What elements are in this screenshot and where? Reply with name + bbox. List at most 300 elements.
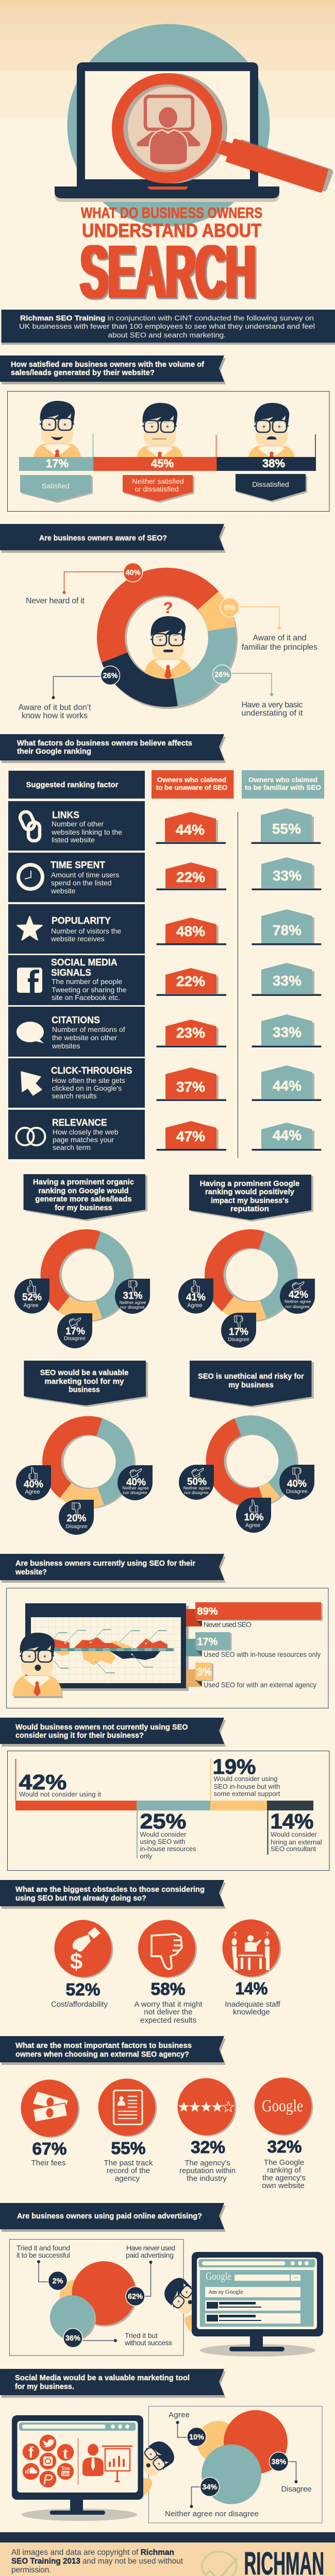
heading: agency factors: What are the most important factors to business <box>15 2042 192 2050</box>
bubble chart <box>197 2410 288 2504</box>
bars: ranking factor percentages <box>156 808 321 1158</box>
row: citations: websites <box>52 1042 80 1050</box>
obstacle: results worry: A worry that it might <box>134 2000 203 2009</box>
callout: never used 62%: Have never used <box>126 2244 175 2252</box>
badge: disagree 17% <box>57 1313 92 1348</box>
bars: popularity <box>157 909 321 945</box>
stat: 42%: Would not consider using it <box>19 1790 101 1798</box>
row: popularity: POPULARITY <box>52 916 111 926</box>
heading: ranking factors: What factors do business owners believe affects <box>17 739 192 748</box>
badge: disagree 17%: Disagree <box>228 1336 249 1343</box>
badge: disagree 20%: 20% <box>66 1513 87 1524</box>
monitor: google ads: Google <box>206 2270 231 2282</box>
badge: agree 40%: Agree <box>25 1489 40 1495</box>
row: relevance: How closely the web <box>53 1128 119 1136</box>
callout: aware and familiar: Aware of it and <box>253 634 306 642</box>
logo: richman <box>196 2546 324 2576</box>
row: relevance: page matches your <box>53 1136 114 1144</box>
bars: time spent: 33% <box>273 868 301 884</box>
badge: neither 40% <box>118 1465 153 1500</box>
factor: track record: 55% <box>111 2139 145 2158</box>
factor: reputation: reputation within <box>179 2166 236 2175</box>
badge: neither 40%: 40% <box>126 1477 146 1488</box>
obstacle: results worry: 58% <box>150 1979 186 1998</box>
heading: satisfaction <box>0 355 226 384</box>
callout: valuable tool statement: marketing tool for my <box>44 1378 124 1386</box>
callout: without success 36%: Tried it but <box>125 2331 158 2340</box>
row: social media: site on Facebook etc. <box>52 993 120 1002</box>
label: satisfied <box>20 475 93 503</box>
callout: disagree 38%: 38% <box>271 2458 287 2466</box>
table header: familiar owners: Owners who claimed <box>248 776 317 784</box>
factor: reputation: 32% <box>191 2138 225 2157</box>
row: click-throughs: clicked on in Google's <box>52 1084 122 1092</box>
table header: ranking factor <box>8 771 145 799</box>
stacked bar: 45% <box>151 457 174 470</box>
factor: fees <box>21 2079 79 2167</box>
table header: ranking factor: Suggested ranking factor <box>26 781 119 789</box>
row: popularity: Number of visitors the <box>51 927 121 935</box>
man peeking from monitor <box>143 2441 174 2496</box>
badge: agree 41%: Agree <box>187 1302 203 1309</box>
bars: citations: 23% <box>176 1025 205 1041</box>
intro banner <box>1 310 335 345</box>
stat: 19%: Would consider using <box>213 1775 277 1783</box>
row: social media: The number of people <box>52 977 122 986</box>
icon: star rating <box>178 2102 234 2112</box>
heading: obstacles <box>0 1880 226 1909</box>
man: surprised <box>12 1633 63 1698</box>
callout: aware and familiar: familiar the principles <box>242 643 317 652</box>
icons: social networks: Tube <box>61 2471 70 2476</box>
row: links: listed website <box>52 836 95 844</box>
heading: obstacles: using SEO but not already doing so? <box>15 1894 146 1903</box>
stat: 19%: 19% <box>212 1755 256 1778</box>
label: dissatisfied: Dissatisfied <box>252 480 289 488</box>
callout: reputation statement <box>189 1175 313 1222</box>
icon: hand with money: $ <box>70 1949 82 1974</box>
man: dissatisfied <box>248 403 295 461</box>
badge: neither 31%: nor disagree <box>120 1304 145 1310</box>
icon: clock <box>19 865 42 889</box>
intro banner: Richman SEO Training in conjunction with CINT conducted the following survey on <box>20 314 314 322</box>
callout: organic ranking statement: ranking on Google would <box>38 1187 128 1195</box>
callout: never used 62%: 62% <box>128 2293 143 2301</box>
callout: never used 62% <box>126 2244 175 2306</box>
badge: neither 50%: nor disagree <box>184 1490 209 1495</box>
icon: chain links <box>18 810 40 841</box>
badge: agree 52%: Agree <box>23 1302 39 1309</box>
footer <box>0 2532 335 2576</box>
callout: aware but don't know: 26% <box>103 672 118 680</box>
label: neither: or dissatisfied <box>135 485 179 493</box>
heading: awareness: Are business owners aware of SEO? <box>39 534 167 543</box>
callout: agree 10%: Agree <box>169 2411 190 2419</box>
row: social media: SOCIAL MEDIA <box>51 957 118 968</box>
badge: disagree 20% <box>59 1500 94 1535</box>
stat: 14%: Would consider <box>271 1831 317 1838</box>
row: relevance <box>8 1110 145 1159</box>
ribbon: in-house 17% <box>186 1632 321 1658</box>
panel: SEO usage <box>6 1588 328 1708</box>
title: UNDERSTAND ABOUT <box>82 220 261 241</box>
callout: organic ranking statement: generate more sales/leads <box>35 1195 132 1204</box>
heading: satisfaction: How satisfied are business owners with the volume of <box>11 361 204 369</box>
obstacle: cost: Cost/affordability <box>51 2000 108 2009</box>
factor: google ranking: the agency's <box>262 2174 306 2182</box>
title: WHAT DO BUSINESS OWNERS <box>81 205 262 222</box>
label: dissatisfied <box>236 474 307 502</box>
obstacle: results worry <box>134 1920 203 2025</box>
bars: relevance <box>157 1121 321 1151</box>
callout: basic understanding: understating of it <box>241 709 303 718</box>
factor: fees: 67% <box>32 2139 67 2158</box>
row: click-throughs: How often the site gets <box>52 1076 125 1084</box>
callout: basic understanding: 26% <box>214 671 230 679</box>
badge: agree 52%: 52% <box>22 1292 42 1303</box>
badge: disagree 40%: Disagree <box>286 1488 308 1495</box>
heading: currently using SEO <box>0 1554 226 1583</box>
obstacle: staff knowledge: Inadequate staff <box>225 2000 280 2009</box>
row: social media <box>8 955 145 1005</box>
callout: valuable tool statement: SEO would be a valuable <box>40 1369 128 1377</box>
badge: neither 50% <box>179 1465 214 1500</box>
obstacle: results worry: expected results <box>140 2016 196 2025</box>
illustration: chart monitor <box>25 1603 189 1691</box>
heading: ranking factors <box>0 734 226 763</box>
monitor: google ads <box>192 2252 323 2357</box>
row: social media: Tweeting or sharing the <box>52 986 127 994</box>
panel: would consider <box>7 1751 329 1870</box>
bars: click-throughs: 37% <box>176 1079 205 1095</box>
row: click-throughs <box>8 1058 145 1108</box>
icon: bank notes <box>33 2092 68 2122</box>
obstacle: staff knowledge <box>223 1920 281 2016</box>
row: citations: Number of mentions of <box>52 1025 125 1033</box>
icon: star <box>17 917 42 940</box>
heading: would consider: Would business owners not currently using SEO <box>15 1723 188 1732</box>
factor: track record: The past track <box>104 2159 153 2167</box>
icon: meeting <box>232 1930 270 1970</box>
badge: agree 10% <box>236 1498 271 1533</box>
row: time spent: website <box>51 887 76 895</box>
ribbon: external agency 3% <box>186 1663 316 1689</box>
badge: disagree 17%: Disagree <box>64 1335 86 1342</box>
copyright text <box>11 2548 183 2574</box>
icon: presenter with chart <box>82 2444 132 2482</box>
badge: neither 50%: Neither agree <box>183 1485 210 1490</box>
row: links: Number of other <box>52 820 104 828</box>
obstacle: staff knowledge: 14% <box>235 1979 268 1998</box>
factor: reputation: the industry <box>187 2174 227 2183</box>
bars: click-throughs: 44% <box>273 1078 301 1094</box>
row: links <box>8 801 145 851</box>
bubble chart <box>50 2261 137 2341</box>
icon: linked rings <box>16 1128 45 1145</box>
badge: neither 31%: 31% <box>123 1291 143 1301</box>
callout: disagree 38% <box>269 2452 312 2494</box>
stat: 25%: using SEO with <box>140 1838 186 1845</box>
badge: neither 42% <box>280 1279 315 1314</box>
icon: hand with money <box>70 1927 100 1974</box>
callout: never used 62%: paid advertising <box>126 2251 174 2259</box>
header background bands <box>0 0 335 117</box>
badge: neither 40%: nor disagree <box>123 1490 147 1495</box>
badge: agree 10%: 10% <box>244 1512 264 1523</box>
monitor: social media <box>12 2415 143 2521</box>
man with question mark <box>144 602 191 679</box>
copyright text: SEO Training 2013 and may not be used without <box>11 2557 183 2566</box>
icon: speech bubble <box>16 1022 44 1043</box>
bars: relevance: 47% <box>176 1128 205 1144</box>
row: links: LINKS <box>52 810 79 820</box>
callout: neither 34%: 34% <box>202 2483 217 2492</box>
callout: agree 10%: 10% <box>189 2433 204 2442</box>
ribbon: external agency 3%: 3% <box>197 1667 212 1678</box>
donut chart: awareness of SEO <box>97 568 238 709</box>
callout: organic ranking statement <box>24 1174 147 1221</box>
label: neither <box>123 475 194 503</box>
heading: paid advertising: Are business owners using paid online advertising? <box>17 2212 202 2221</box>
stat: 25%: Would consider <box>140 1831 187 1838</box>
callout: neither 34%: Neither agree nor disagree <box>165 2510 259 2518</box>
donut: reputation <box>178 1229 315 1348</box>
callout: aware and familiar: 8% <box>224 604 235 612</box>
callout: aware but don't know: Aware of it but don't <box>19 703 91 712</box>
bars: citations <box>157 1014 321 1047</box>
bars: links <box>156 808 321 844</box>
callout: valuable tool statement <box>24 1361 148 1407</box>
callout: never heard: 40% <box>125 569 141 577</box>
label: satisfied: Satisfied <box>42 482 70 490</box>
row: relevance: search term <box>53 1143 91 1151</box>
factor: reputation: The agency's <box>185 2159 230 2167</box>
bars: social media: 22% <box>176 973 205 989</box>
obstacle: staff knowledge: knowledge <box>233 2008 270 2016</box>
row: social media: SIGNALS <box>51 968 91 978</box>
stat: 14%: hiring an external <box>271 1838 322 1846</box>
callout: successful 2%: 2% <box>53 2277 63 2285</box>
icons: social networks: P <box>43 2471 53 2487</box>
callout: valuable tool statement: business <box>69 1386 100 1394</box>
badge: neither 42%: 42% <box>289 1290 308 1300</box>
stat: 19% <box>212 1755 280 1798</box>
heading: agency factors: owners when choosing an external SEO agency? <box>15 2050 189 2059</box>
row: time spent: TIME SPENT <box>51 860 105 870</box>
callout: unethical statement <box>190 1361 314 1408</box>
ribbon: never used 89%: Never used SEO <box>204 1620 252 1629</box>
bars: social media: 33% <box>273 973 301 989</box>
callout: organic ranking statement: for my business <box>55 1204 112 1212</box>
callout: basic understanding: Have a very basic <box>241 701 303 709</box>
bars: social media <box>157 963 321 996</box>
donut: unethical <box>179 1415 314 1533</box>
callout: without success 36% <box>63 2329 172 2347</box>
callout: never heard <box>26 563 142 605</box>
callout: successful 2%: Tried it and found <box>16 2244 70 2252</box>
badge: disagree 17% <box>221 1313 256 1348</box>
row: links: websites linking to the <box>51 828 122 836</box>
heading: currently using SEO: Are business owners currently using SEO for their <box>15 1560 195 1568</box>
bars: popularity: 78% <box>273 922 301 938</box>
factor: google ranking <box>255 2077 313 2190</box>
ribbon: never used 89%: 89% <box>197 1606 218 1617</box>
stat: 19%: some external support <box>213 1790 280 1798</box>
callout: organic ranking statement: Having a prominent organic <box>33 1178 134 1187</box>
callout: agree 10% <box>169 2411 206 2446</box>
heading: obstacles: What are the biggest obstacles to those considering <box>15 1886 205 1894</box>
badge: neither 40%: Neither agree <box>122 1485 149 1490</box>
heading: would consider: consider using it for their business? <box>15 1732 144 1740</box>
intro banner: about SEO and search marketing. <box>108 331 226 339</box>
icons: social networks: You <box>61 2466 70 2471</box>
callout: reputation statement: ranking would positively <box>205 1188 294 1196</box>
callout: aware and familiar <box>220 598 317 652</box>
table header: familiar owners <box>242 770 324 799</box>
factor: track record: agency <box>115 2174 140 2183</box>
heading: agency factors <box>0 2036 226 2065</box>
badge: disagree 17%: 17% <box>65 1326 85 1337</box>
table header: unaware owners: Owners who claimed <box>157 776 226 784</box>
row: click-throughs: search results <box>52 1092 97 1100</box>
badge: disagree 17%: 17% <box>229 1327 248 1337</box>
heading: paid advertising <box>0 2203 226 2232</box>
badge: disagree 40%: 40% <box>287 1479 307 1489</box>
heading: satisfaction: sales/leads generated by their website? <box>11 369 155 377</box>
factor: fees: Their fees <box>31 2159 65 2167</box>
callout: basic understanding <box>212 665 303 718</box>
row: popularity <box>8 904 145 954</box>
copyright text: permission. <box>11 2566 52 2574</box>
factor: track record: record of the <box>107 2166 150 2175</box>
icon: google wordmark: Google <box>262 2097 303 2115</box>
ribbon: in-house 17%: Used SEO with in-house resources only <box>204 1650 321 1658</box>
callout: without success 36%: without success <box>124 2338 172 2347</box>
bars: time spent <box>157 857 321 890</box>
callout: reputation statement: Having a prominent Google <box>200 1180 299 1188</box>
obstacle: cost <box>51 1920 113 2009</box>
bars: click-throughs <box>157 1065 321 1101</box>
badge: neither 42%: Neither agree <box>284 1299 311 1304</box>
bars: links: 44% <box>176 822 205 838</box>
table header: unaware owners: to be unaware of SEO <box>156 784 227 791</box>
callout: never heard: Never heard of it <box>26 597 85 605</box>
ribbon: in-house 17%: 17% <box>197 1636 218 1648</box>
bars: citations: 33% <box>273 1024 301 1040</box>
callout: neither 34% <box>165 2477 259 2518</box>
icon: facebook <box>17 968 42 993</box>
bars: time spent: 22% <box>176 869 205 885</box>
heading: awareness <box>0 524 226 553</box>
icon: cursor <box>21 1072 42 1095</box>
obstacle: cost: 52% <box>66 1980 100 1999</box>
panel: paid advertising <box>9 2239 183 2355</box>
icon: document <box>113 2091 142 2125</box>
row: relevance: RELEVANCE <box>52 1117 107 1128</box>
table header: unaware owners <box>152 770 234 799</box>
table header: familiar owners: to be familiar with SEO <box>245 784 321 791</box>
icon: meeting: ? <box>265 1930 269 1938</box>
badge: agree 40%: 40% <box>24 1479 43 1490</box>
badge: neither 31%: Neither agree <box>120 1300 146 1305</box>
panel: social media <box>148 2406 322 2523</box>
stat: 25%: 25% <box>140 1809 187 1833</box>
callout: successful 2%: it to be successful <box>16 2251 70 2259</box>
segmented bar <box>15 1759 313 1858</box>
stat: 14%: 14% <box>270 1809 313 1833</box>
label: neither: Neither satisfied <box>132 477 184 485</box>
monitor: google ads: Ads by Google <box>209 2288 243 2295</box>
heading: social media: for my business. <box>15 2383 74 2391</box>
man peeking at monitor <box>164 2278 192 2332</box>
row: time spent <box>8 853 145 902</box>
icons: social networks <box>23 2435 74 2487</box>
factor: google ranking: 32% <box>267 2137 302 2156</box>
callout: unethical statement: SEO is unethical and risky for <box>198 1372 304 1381</box>
factor: google ranking: The Google <box>264 2158 304 2167</box>
ribbon: never used 89% <box>186 1602 323 1629</box>
stat: 14%: SEO consultant <box>271 1845 316 1853</box>
callout: aware but don't know: know how it works <box>22 711 88 720</box>
callout: disagree 38%: Disagree <box>281 2485 312 2494</box>
row: click-throughs: CLICK-THROUGHS <box>51 1065 132 1076</box>
stat: 19%: SEO in-house but with <box>213 1783 280 1790</box>
heading: ranking factors: their Google ranking <box>17 748 91 756</box>
panel: satisfaction <box>7 392 329 511</box>
icon: meeting: ? <box>233 1930 237 1938</box>
icons: social networks: f <box>28 2444 34 2461</box>
donut: organic ranking <box>14 1229 150 1348</box>
bars: popularity: 48% <box>176 923 205 939</box>
badge: agree 52% <box>14 1279 49 1314</box>
badge: agree 41% <box>178 1279 213 1314</box>
ribbon: external agency 3%: Used SEO for with an external agency <box>204 1681 316 1689</box>
stat: 14% <box>270 1809 322 1853</box>
obstacle: results worry: not deliver the <box>144 2008 193 2016</box>
hero illustration: laptop with magnifier <box>55 24 333 227</box>
callout: aware but don't know <box>19 666 120 720</box>
callout: reputation statement: reputation <box>230 1205 269 1213</box>
factor: google ranking: own website <box>262 2181 305 2190</box>
callout: reputation statement: impact my business's <box>211 1197 289 1205</box>
icon: thumb down <box>152 1934 182 1969</box>
bars: links: 55% <box>272 821 301 837</box>
row: citations: the website on other <box>52 1033 117 1042</box>
badge: disagree 40% <box>279 1465 314 1500</box>
stacked bar: 38% <box>262 457 285 470</box>
badge: agree 40% <box>16 1465 51 1500</box>
icons: social networks: t <box>63 2444 69 2462</box>
copyright text: All images and data are copyright of Richman <box>11 2548 174 2557</box>
row: popularity: website receives <box>51 935 104 943</box>
donut: valuable tool <box>16 1416 153 1535</box>
stacked bar: 17% <box>46 457 69 470</box>
man: satisfied <box>34 401 81 459</box>
badge: agree 10%: Agree <box>245 1522 260 1529</box>
stacked bar <box>19 434 316 471</box>
bars: relevance: 44% <box>273 1127 301 1143</box>
man with question mark: ? <box>163 599 173 617</box>
factor: track record <box>98 2078 157 2183</box>
stat: 42% <box>19 1770 101 1798</box>
intro banner: UK businesses with fewer than 100 employees to see what they understand and feel <box>19 323 315 330</box>
badge: neither 50%: 50% <box>187 1477 207 1487</box>
row: time spent: spend on the listed <box>51 879 112 887</box>
factor: reputation <box>177 2078 236 2183</box>
badge: agree 41%: 41% <box>186 1292 206 1303</box>
badge: neither 31% <box>115 1279 150 1314</box>
row: citations <box>8 1007 145 1057</box>
